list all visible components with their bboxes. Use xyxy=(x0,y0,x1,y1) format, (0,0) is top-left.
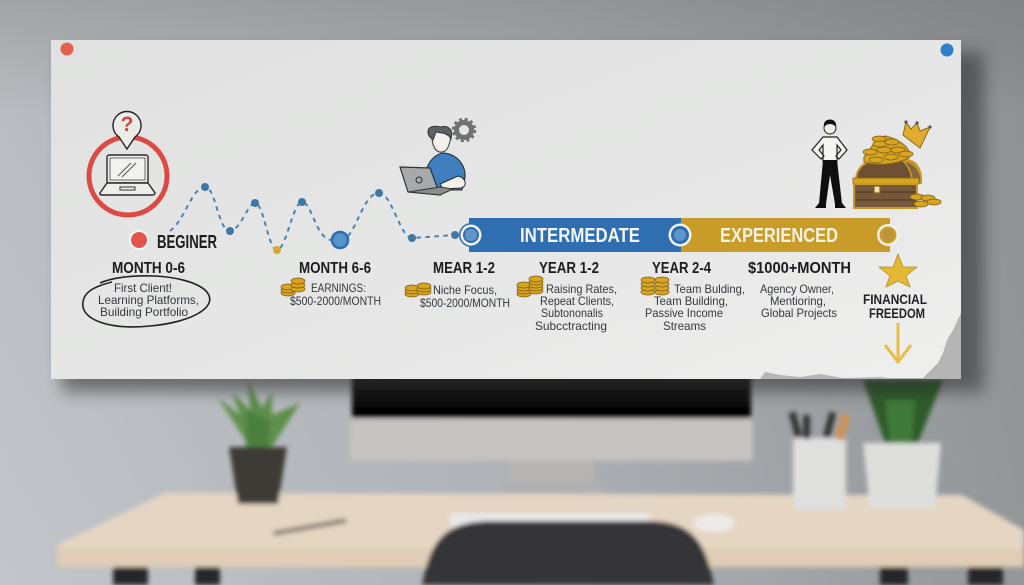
column: mear 1-2: MEAR 1-2 xyxy=(433,260,495,277)
column: year 2-4 xyxy=(641,260,745,333)
icon: laptop in red ring with question bubble: ? xyxy=(121,113,133,136)
board xyxy=(51,40,961,379)
column: month 0-6 xyxy=(83,260,210,327)
icon: laptop in red ring with question bubble xyxy=(89,112,167,215)
icon: coins xyxy=(641,277,669,295)
column: mear 1-2: Niche Focus, xyxy=(433,283,497,297)
column: month 6-6: MONTH 6-6 xyxy=(299,260,371,277)
column: year 1-2 xyxy=(517,260,617,333)
keyboard xyxy=(450,513,650,527)
beginner label: BEGINER xyxy=(157,232,217,252)
hand-drawn ellipse callout xyxy=(83,276,210,327)
path nodes xyxy=(201,183,459,254)
column: month 0-6: First Client! xyxy=(114,281,172,295)
column: year 2-4: Team Bulding, xyxy=(674,282,745,296)
icon: person with laptop and gear xyxy=(400,119,475,195)
column: year 1-2: Repeat Clients, xyxy=(540,294,614,308)
right plant xyxy=(863,380,943,508)
stage bar: intermediate xyxy=(459,218,681,252)
beginner marker xyxy=(130,231,148,249)
column: year 1-2: Subcctracting xyxy=(535,319,607,333)
icon: standing person xyxy=(812,120,847,208)
dashed progress path xyxy=(170,183,459,254)
column: month 0-6: MONTH 0-6 xyxy=(112,260,185,277)
board shadow xyxy=(62,52,984,392)
icon: coins xyxy=(405,283,431,297)
left plant xyxy=(218,382,300,504)
column: year 1-2: Raising Rates, xyxy=(546,282,617,296)
financial freedom label: FINANCIAL xyxy=(863,291,927,307)
column: year 2-4: Passive Income xyxy=(645,306,723,320)
icon: star xyxy=(879,254,917,287)
column: year 1-2: YEAR 1-2 xyxy=(539,260,599,277)
financial freedom label: FREEDOM xyxy=(869,305,925,321)
column: $1000+ month xyxy=(748,260,851,320)
icon: coins xyxy=(517,276,543,297)
column: $1000+ month: Agency Owner, xyxy=(760,282,834,296)
mouse xyxy=(693,514,735,532)
stage bar: intermediate: INTERMEDATE xyxy=(520,225,640,247)
desk xyxy=(57,493,1024,585)
column: $1000+ month: $1000+MONTH xyxy=(748,260,851,277)
monitor xyxy=(350,375,753,510)
column: $1000+ month: Global Projects xyxy=(761,306,837,320)
icon: treasure chest xyxy=(853,136,941,208)
pin: blue xyxy=(940,44,954,56)
column: mear 1-2: $500-2000/MONTH xyxy=(420,296,510,310)
column: month 0-6: Building Portfolio xyxy=(100,305,188,319)
arrow: down to financial freedom xyxy=(885,323,911,362)
stage bar: experienced: EXPERIENCED xyxy=(720,225,838,247)
pin: red xyxy=(60,42,74,56)
column: $1000+ month: Mentioring, xyxy=(770,294,826,308)
stage bar: experienced xyxy=(668,218,899,252)
column: year 2-4: YEAR 2-4 xyxy=(652,260,711,277)
chair xyxy=(422,521,714,585)
node: month 6 xyxy=(332,232,348,248)
column: month 6-6: $500-2000/MONTH xyxy=(290,294,381,308)
column: year 2-4: Team Building, xyxy=(654,294,728,308)
financial freedom label xyxy=(863,291,927,321)
icon: coins xyxy=(281,278,305,296)
pen cup xyxy=(789,411,850,510)
column: mear 1-2 xyxy=(405,260,510,310)
icon: crown xyxy=(903,120,932,148)
column: month 0-6: Learning Platforms, xyxy=(98,293,199,307)
column: month 6-6 xyxy=(281,260,381,308)
pen on desk xyxy=(273,518,347,536)
column: month 6-6: EARNINGS: xyxy=(311,281,366,295)
column: year 2-4: Streams xyxy=(663,319,706,333)
column: year 1-2: Subtononalis xyxy=(541,306,603,320)
